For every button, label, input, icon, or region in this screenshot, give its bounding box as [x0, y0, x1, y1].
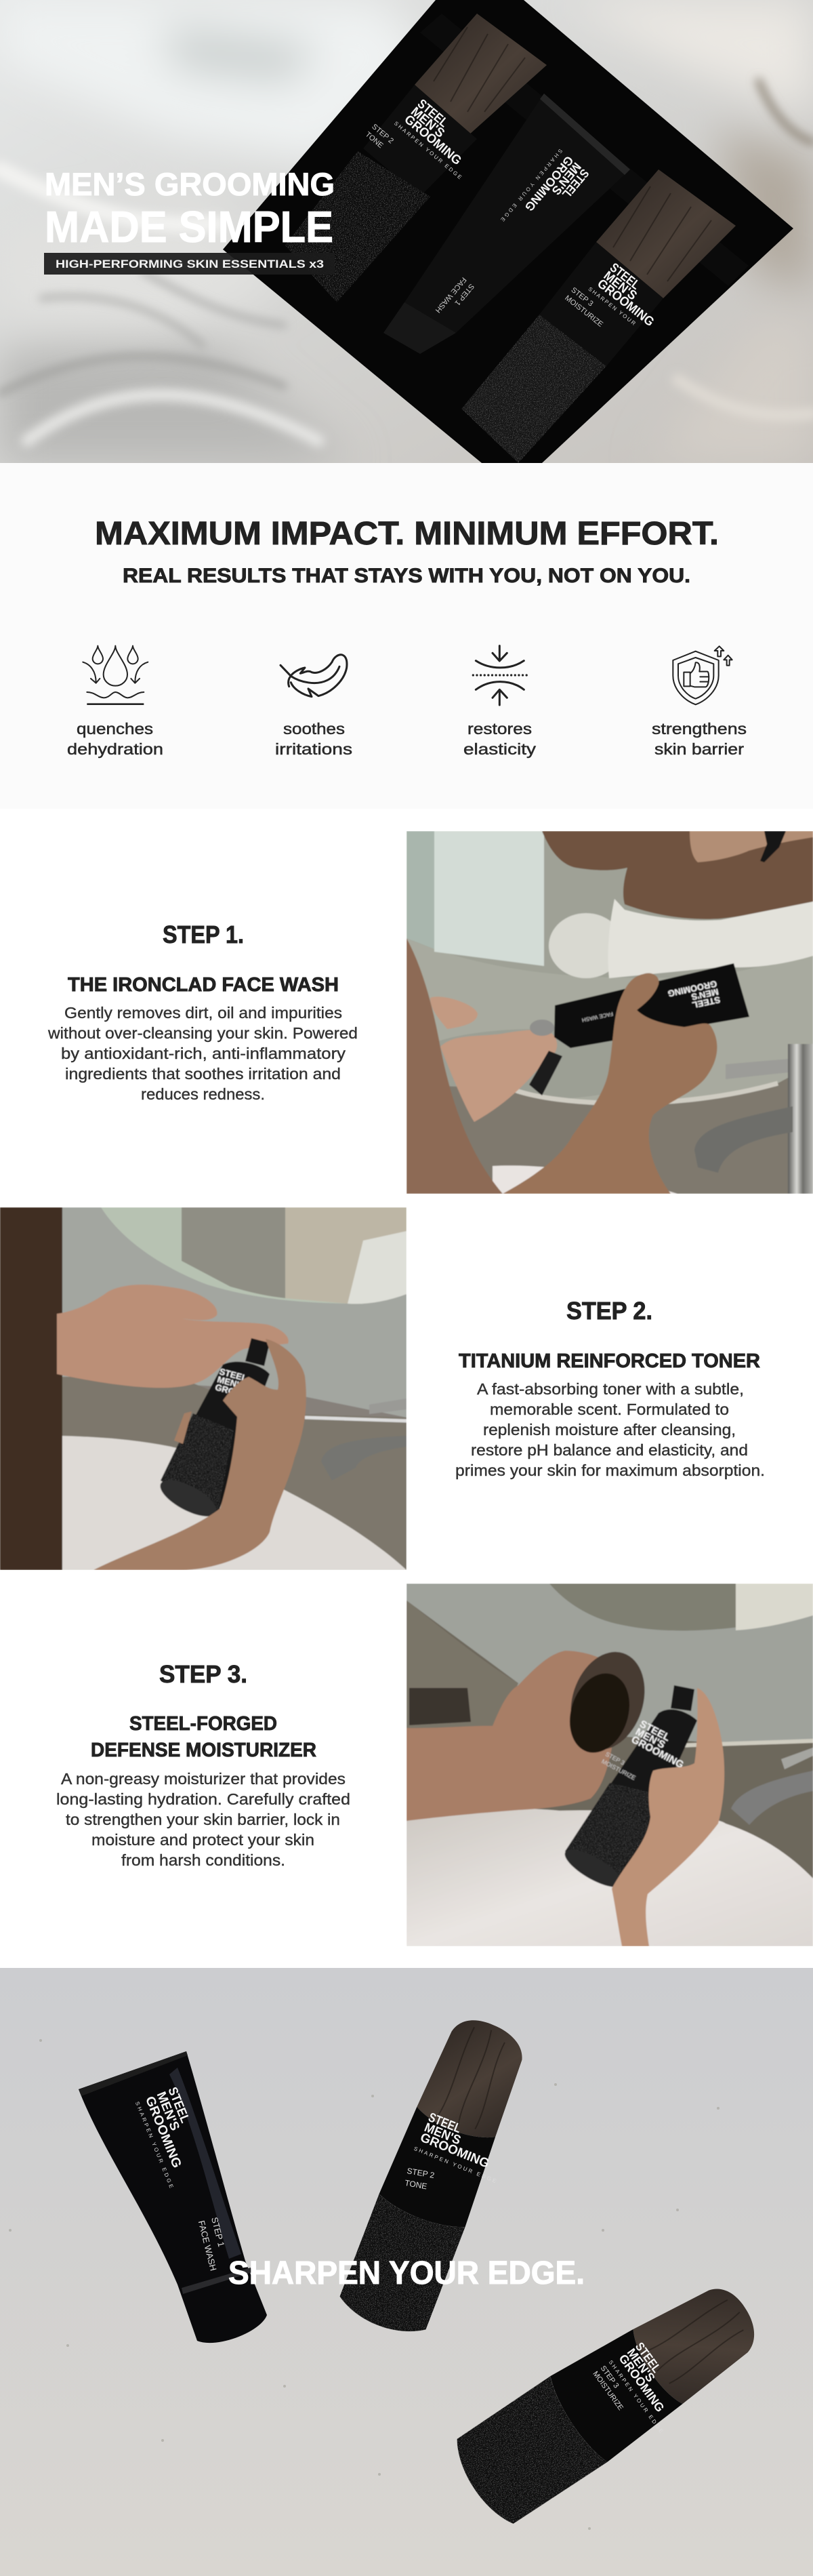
product: moisturizer in box: SHARPEN YOUR [587, 286, 638, 327]
tube [529, 1051, 562, 1095]
sink [406, 1809, 813, 1946]
icon: shield with thumbs up [673, 646, 732, 704]
step 2 text: primes your skin for maximum absorption. [455, 1462, 765, 1479]
step 3 text: A non-greasy moisturizer that provides [61, 1770, 346, 1788]
closing headline: SHARPEN YOUR EDGE. [228, 2255, 585, 2291]
benefit label: strengthens skin barrier [652, 720, 747, 758]
step 2 text: replenish moisture after cleansing, [483, 1421, 736, 1438]
product: face wash tube: GROOMING [142, 2094, 184, 2170]
step 3 text: DEFENSE MOISTURIZER [91, 1739, 316, 1761]
product: toner bottle: TONE [404, 2178, 428, 2191]
step 2 text: STEP 2. [566, 1297, 652, 1325]
step 3 text [56, 1660, 350, 1869]
hero title: MEN’S GROOMING [45, 166, 335, 202]
man's neck and chest [542, 831, 813, 919]
product: toner bottle [335, 2009, 537, 2342]
product: moisturizer bottle: MEN'S [625, 2346, 658, 2384]
product: moisturizer in box: STEEL [607, 260, 643, 293]
step 1 text: THE IRONCLAD FACE WASH [68, 974, 339, 996]
step 2 text: TITANIUM REINFORCED TONER [459, 1350, 760, 1372]
foreground arm [0, 1207, 62, 1570]
counter speckles [9, 2039, 720, 2530]
product: face wash tube in box: GROOMING [522, 153, 576, 214]
lower hand and forearm [93, 1339, 306, 1570]
product: face wash tube [79, 2051, 267, 2343]
product: toner in box: GROOMING [402, 113, 464, 168]
step 2 photo: applying toner: MEN'S [216, 1374, 246, 1391]
step 3 text: moisture and protect your skin [91, 1831, 314, 1849]
product: moisturizer in box: GROOMING [594, 277, 656, 329]
icon: water drops [83, 646, 148, 704]
step 2 photo: applying toner: STEEL [218, 1366, 249, 1384]
product: face wash tube in box: MEN'S [549, 160, 584, 198]
closing photo: three products on counter [0, 1968, 813, 2576]
product: toner in box [285, 14, 547, 302]
product: face wash tube: MEN'S [154, 2090, 182, 2133]
step 1 photo: applying face wash: GROOMING [667, 979, 718, 999]
product: toner bottle: MEN'S [422, 2120, 463, 2148]
step 1 text: reduces redness. [141, 1085, 265, 1103]
step 2 text: restore pH balance and elasticity, and [471, 1441, 748, 1459]
product: face wash tube in box [383, 94, 630, 354]
step 3 text: from harsh conditions. [121, 1851, 285, 1869]
product: moisturizer bottle: STEP 3 [599, 2364, 621, 2390]
step 3 photo: applying moisturizer [406, 1584, 813, 1946]
product: toner bottle: STEEL [426, 2110, 463, 2136]
product: moisturizer in box: STEP 3 [570, 286, 595, 308]
subheading: REAL RESULTS THAT STAYS WITH YOU, NOT ON YOU. [123, 565, 690, 587]
right hand and forearm [503, 973, 717, 1194]
product: face wash tube: STEP 1 [209, 2216, 226, 2248]
product: face wash tube in box: FACE WASH [434, 275, 467, 315]
benefit label: restores elasticity [463, 720, 537, 758]
step 2 text [455, 1297, 765, 1479]
hero title [45, 166, 335, 251]
left hand [430, 997, 557, 1122]
hero title: MADE SIMPLE [45, 202, 333, 251]
benefit label: restores elasticity: restores [467, 720, 532, 738]
step 1 photo: applying face wash: MEN'S [690, 986, 720, 1003]
right hand [612, 1688, 724, 1946]
product: moisturizer in box: MEN'S [601, 268, 640, 303]
panel: benefits [0, 463, 813, 809]
hero subtitle bar [44, 253, 335, 275]
hero subtitle bar: HIGH-PERFORMING SKIN ESSENTIALS x3 [56, 258, 324, 270]
step 1 text: ingredients that soothes irritation and [65, 1065, 341, 1083]
step 3 photo: applying moisturizer: STEEL [638, 1718, 672, 1744]
step 3 photo: applying moisturizer: GROOMING [629, 1733, 686, 1771]
heading: MAXIMUM IMPACT. MINIMUM EFFORT. [95, 516, 719, 552]
benefit label: strengthens skin barrier: strengthens [652, 720, 747, 738]
hero photo: gift box on white sheets [0, 0, 813, 463]
step 3 photo: applying moisturizer: STEP 3 [604, 1750, 626, 1767]
product: face wash tube in box: STEP 1 [453, 282, 476, 307]
step 1 text: by antioxidant-rich, anti-inflammatory [61, 1045, 346, 1062]
benefit label: strengthens skin barrier: skin barrier [654, 740, 744, 758]
benefit label: quenches dehydration: dehydration [67, 740, 163, 758]
product: face wash tube in box: STEEL [560, 166, 591, 201]
product: moisturizer bottle: SHARPEN YOUR EDGE [608, 2359, 665, 2436]
benefit label: restores elasticity: elasticity [463, 740, 537, 758]
product: toner in box: SHARPEN YOUR EDGE [393, 120, 464, 182]
step 2 photo: applying toner: GROOM [214, 1382, 250, 1401]
step 1 photo: applying face wash [406, 831, 813, 1194]
icon: feather [280, 655, 347, 697]
step 3 text: STEP 3. [159, 1660, 247, 1688]
product: face wash tube: STEEL [165, 2085, 192, 2125]
benefit label: quenches dehydration: quenches [77, 720, 153, 738]
step 1 text: Gently removes dirt, oil and impurities [64, 1004, 342, 1022]
arm and left hand [406, 1651, 612, 1821]
black gift box [223, 0, 793, 463]
product: toner bottle: GROOMING [418, 2131, 491, 2171]
product: toner in box: MEN'S [408, 104, 447, 141]
step 3 text: STEEL-FORGED [129, 1713, 277, 1735]
product: moisturizer bottle [446, 2266, 774, 2531]
product: moisturizer bottle: GROOMING [616, 2352, 667, 2415]
icon: compression arrows [473, 646, 526, 705]
upper hand [57, 1285, 289, 1388]
product: toner bottle: SHARPEN YOUR EDGE [413, 2146, 499, 2185]
product: face wash tube in box: SHARPEN YOUR EDGE [498, 148, 564, 224]
product: face wash tube: FACE WASH [196, 2219, 219, 2272]
product: moisturizer bottle: MOISTURIZE [591, 2370, 625, 2412]
bottle [245, 1338, 270, 1366]
step 3 photo: applying moisturizer: MEN'S [633, 1726, 667, 1751]
step 1 text: STEP 1. [163, 921, 244, 948]
step 1 text: without over-cleansing your skin. Powered [47, 1024, 358, 1042]
product: moisturizer bottle: STEEL [633, 2340, 663, 2375]
upper hand [690, 831, 813, 862]
step 3 text: to strengthen your skin barrier, lock in [66, 1811, 340, 1828]
product: face wash tube: SHARPEN YOUR EDGE [134, 2101, 175, 2191]
faucet [321, 1436, 406, 1481]
sink [60, 1436, 406, 1570]
towel [608, 899, 813, 978]
benefit label: soothes irritations: soothes [283, 720, 345, 738]
step 1 photo: applying face wash: FACE WASH [581, 1011, 614, 1023]
benefit label: quenches dehydration [67, 720, 163, 758]
step 2 text: A fast-absorbing toner with a subtle, [477, 1380, 744, 1398]
step 1 text [47, 921, 358, 1103]
left arm [406, 938, 503, 1194]
benefit label: soothes irritations [275, 720, 352, 758]
faucet [731, 1771, 813, 1825]
faucet [788, 1044, 813, 1194]
bottle [671, 1685, 694, 1711]
step 2 photo: applying toner [0, 1207, 406, 1570]
step 3 photo: applying moisturizer: MOISTURIZE [600, 1758, 637, 1782]
product: toner in box: TONE [364, 130, 385, 150]
product: moisturizer in box: MOISTURIZE [563, 294, 604, 329]
product: moisturizer in box [461, 169, 736, 463]
step 3 text: long-lasting hydration. Carefully crafted [56, 1790, 350, 1808]
benefit label: soothes irritations: irritations [275, 740, 352, 758]
product: toner in box: STEEL [415, 97, 451, 130]
wood cap [559, 1643, 656, 1759]
product: toner bottle: STEP 2 [406, 2166, 436, 2180]
product: toner in box: STEP 2 [370, 123, 395, 145]
step 1 photo: applying face wash: STEEL [691, 994, 721, 1010]
step 2 text: memorable scent. Formulated to [490, 1401, 729, 1418]
